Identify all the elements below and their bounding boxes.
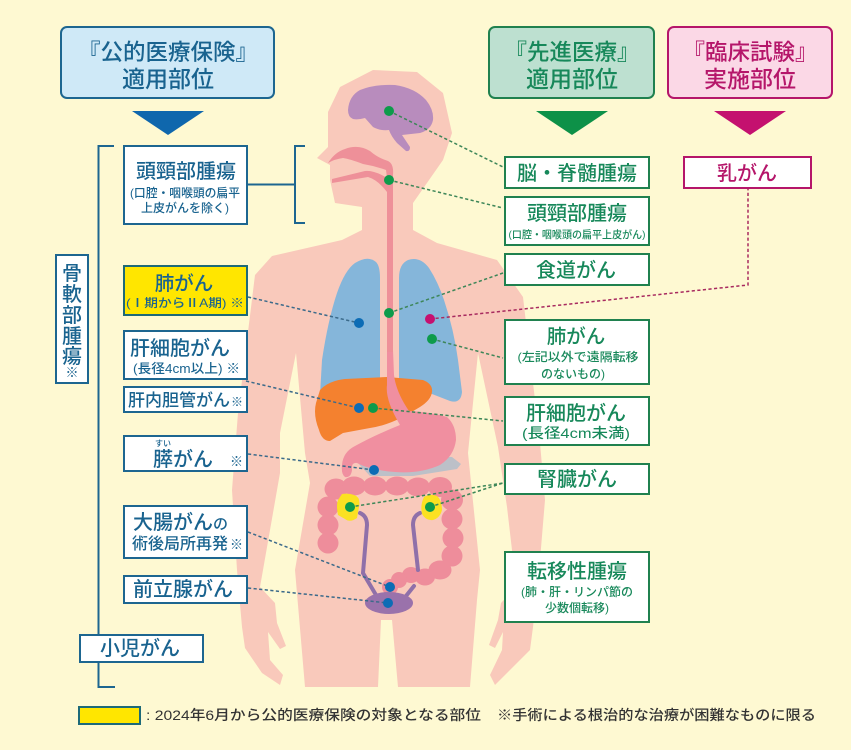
box: pancreatic cancer xyxy=(124,436,247,471)
box: hepatocellular carcinoma: 肝細胞がん xyxy=(130,337,230,360)
heading: advanced medicine: 適用部位 xyxy=(526,66,618,92)
box: pediatric cancer: 小児がん xyxy=(100,637,180,660)
box: breast cancer: 乳がん xyxy=(717,162,777,185)
box: bone and soft tissue tumor: 軟 xyxy=(62,283,82,306)
box: head and neck tumor: (口腔・咽喉頭の扁平 xyxy=(130,185,240,200)
box: pancreatic cancer: ※ xyxy=(230,454,243,469)
box: metastatic tumor: (肺・肝・リンパ節の xyxy=(521,584,633,599)
icon: brain xyxy=(348,85,433,151)
box: breast cancer xyxy=(684,157,811,188)
icon: throat and oral cavity xyxy=(328,147,393,352)
left bracket xyxy=(98,146,115,687)
dotted connectors: public insurance xyxy=(246,297,390,603)
box: prostate cancer xyxy=(124,576,247,603)
arrow: clinical trials xyxy=(714,111,786,135)
legend xyxy=(79,707,816,724)
box: colorectal cancer recurrence xyxy=(124,506,247,558)
box: lung cancer, yellow highlight: (Ⅰ期からⅡA期) ※ xyxy=(126,296,244,310)
box: pancreatic cancer: すい xyxy=(155,439,171,448)
box: bone and soft tissue tumor xyxy=(56,255,88,383)
box: pancreatic cancer: 膵がん xyxy=(153,448,213,471)
box: lung cancer, advanced: のないもの) xyxy=(541,367,605,381)
heading: advanced medicine xyxy=(489,27,654,98)
icon: bladder and prostate xyxy=(365,592,413,614)
box: bone and soft tissue tumor: 部 xyxy=(62,304,82,327)
heading: public insurance xyxy=(61,27,274,98)
box: head and neck tumor, advanced xyxy=(505,197,649,245)
head and neck bracket xyxy=(247,146,305,223)
box: bone and soft tissue tumor: 骨 xyxy=(62,263,82,285)
box: lung cancer, advanced xyxy=(505,320,649,384)
heading: advanced medicine: 『先進医療』 xyxy=(504,40,640,65)
box: colorectal cancer recurrence: 術後局所再発 xyxy=(132,535,228,553)
box: bone and soft tissue tumor: 腫 xyxy=(62,325,82,348)
marker dots xyxy=(345,106,437,608)
legend: : 2024年6月から公的医療保険の対象となる部位 xyxy=(146,707,481,723)
human body silhouette xyxy=(232,70,545,687)
box: intrahepatic bile duct cancer: 肝内胆管がん xyxy=(128,390,230,410)
box: head and neck tumor: 上皮がんを除く) xyxy=(141,200,229,215)
box: head and neck tumor, advanced: (口腔・咽喉頭の扁平上皮がん) xyxy=(508,228,646,241)
heading: clinical trials: 『臨床試験』 xyxy=(682,40,818,65)
heading: clinical trials xyxy=(668,27,832,98)
icon: colon xyxy=(318,476,464,595)
box: lung cancer, advanced: (左記以外で遠隔転移 xyxy=(518,349,638,364)
box: brain and spinal cord tumor xyxy=(505,157,649,188)
heading: clinical trials: 実施部位 xyxy=(704,66,796,92)
box: hepatocellular carcinoma xyxy=(124,331,247,379)
box: colorectal cancer recurrence: 大腸がんの xyxy=(133,511,228,534)
icon: kidneys highlighted yellow xyxy=(337,494,442,521)
box: lung cancer, yellow highlight xyxy=(124,266,247,315)
heading: public insurance: 適用部位 xyxy=(122,66,214,92)
box: hepatocellular carcinoma, advanced xyxy=(505,397,649,445)
box: prostate cancer: 前立腺がん xyxy=(133,578,233,601)
box: pediatric cancer xyxy=(80,635,203,662)
icon: pancreas xyxy=(357,455,461,476)
box: esophageal cancer xyxy=(505,254,649,285)
box: metastatic tumor xyxy=(505,552,649,622)
icon: ureters xyxy=(360,513,420,596)
box: head and neck tumor xyxy=(124,146,247,224)
box: brain and spinal cord tumor: 脳・脊髄腫瘍 xyxy=(517,162,637,185)
box: metastatic tumor: 転移性腫瘍 xyxy=(527,560,627,583)
box: lung cancer, yellow highlight: 肺がん xyxy=(155,273,213,295)
arrow: advanced medicine xyxy=(536,111,608,135)
dotted connectors: advanced medicine xyxy=(350,111,503,507)
box: intrahepatic bile duct cancer xyxy=(124,387,247,412)
box: intrahepatic bile duct cancer: ※ xyxy=(231,395,243,409)
icon: stomach and esophagus xyxy=(342,350,456,477)
box: metastatic tumor: 少数個転移) xyxy=(545,600,609,615)
box: hepatocellular carcinoma, advanced: 肝細胞がん xyxy=(526,402,626,425)
box: head and neck tumor, advanced: 頭頸部腫瘍 xyxy=(527,202,627,225)
box: kidney cancer xyxy=(505,464,649,494)
heading: public insurance: 『公的医療保険』 xyxy=(78,40,258,65)
box: bone and soft tissue tumor: 瘍 xyxy=(62,345,82,368)
box: kidney cancer: 腎臓がん xyxy=(537,468,617,491)
box: colorectal cancer recurrence: ※ xyxy=(230,537,243,552)
legend: ※手術による根治的な治療が困難なものに限る xyxy=(497,707,816,723)
dotted connector: clinical trial xyxy=(430,188,748,319)
box: head and neck tumor: 頭頸部腫瘍 xyxy=(136,160,236,183)
box: bone and soft tissue tumor: ※ xyxy=(65,365,79,380)
box: esophageal cancer: 食道がん xyxy=(536,259,616,282)
arrow: public insurance xyxy=(132,111,204,135)
icon: lungs xyxy=(320,259,462,402)
box: hepatocellular carcinoma: (長径4cm以上) ※ xyxy=(133,361,240,376)
box: hepatocellular carcinoma, advanced: (長径4cm未満) xyxy=(522,425,630,441)
icon: liver xyxy=(315,377,432,441)
box: lung cancer, advanced: 肺がん xyxy=(547,326,605,348)
